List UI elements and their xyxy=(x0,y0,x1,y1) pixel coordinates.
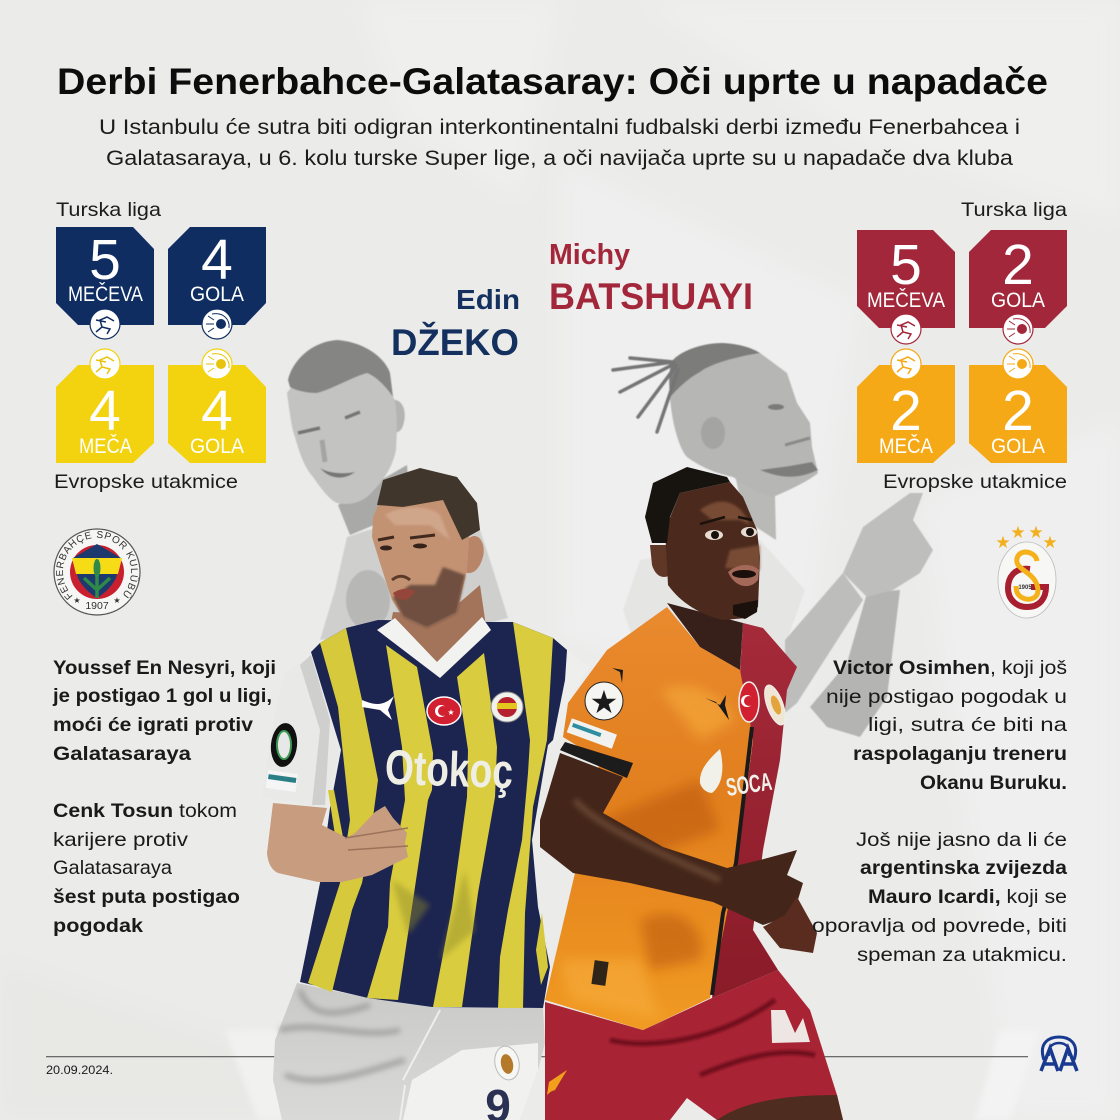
icon: ball in net xyxy=(1003,314,1033,344)
footer rule xyxy=(46,1056,1028,1057)
text block right xyxy=(812,657,1067,966)
logo: Anadolu Agency xyxy=(1041,1037,1077,1071)
player name: Michy Batshuayi xyxy=(549,239,753,317)
text block left: Galatasaraya xyxy=(53,857,172,879)
shorts xyxy=(273,983,545,1120)
sponsor: SOCAR: SOCA xyxy=(724,768,774,802)
title: Derbi Fenerbahce-Galatasaray: Oči uprte u napadače xyxy=(57,60,1048,102)
jersey body xyxy=(300,620,567,1008)
badge: Turkish flag xyxy=(739,682,759,722)
subtitle: U Istanbulu će sutra biti odigran interkontinentalni fudbalski derbi između Fenerbahcea i xyxy=(99,116,1020,139)
stat panel: Džeko league goals: 4 xyxy=(201,228,233,292)
stat panel: Batshuayi European matches: MEČA xyxy=(879,435,933,458)
stat panel: Batshuayi league matches: 5 xyxy=(890,233,922,297)
stat panel: Džeko European matches: 4 xyxy=(89,379,121,443)
sponsor: SOCAR xyxy=(700,749,774,802)
icon: player xyxy=(891,314,921,344)
stat panel: Batshuayi European matches xyxy=(857,349,955,463)
text block left xyxy=(52,657,276,937)
player name: Michy Batshuayi: Michy xyxy=(549,239,630,271)
text block left: Cenk Tosun tokom xyxy=(53,800,237,822)
text block right: Mauro Icardi, koji se xyxy=(868,886,1067,908)
text block right: Victor Osimhen , koji još xyxy=(833,657,1067,679)
text block right: oporavlja od povrede, biti xyxy=(812,915,1067,937)
puma logo xyxy=(362,696,394,720)
text block right: argentinska zvijezda xyxy=(860,857,1067,879)
jersey orange half xyxy=(545,607,753,1030)
arm and hand xyxy=(267,803,408,882)
shorts xyxy=(545,970,843,1120)
label: Turska liga left: Turska liga xyxy=(56,199,161,221)
stat panel: Batshuayi league matches: MEČEVA xyxy=(867,289,945,312)
stat panel: Batshuayi league goals: GOLA xyxy=(991,289,1045,312)
stat panel: Batshuayi league goals xyxy=(969,230,1067,344)
icon: player xyxy=(891,349,921,379)
stat panel: Džeko league goals: GOLA xyxy=(190,283,244,306)
stat panel: Džeko European goals: GOLA xyxy=(190,435,244,458)
icon: player xyxy=(90,309,120,339)
badge: Turkish flag xyxy=(427,697,461,725)
icon: ball in net xyxy=(202,349,232,379)
badge: Galatasaray crest xyxy=(760,683,790,727)
arm xyxy=(540,753,803,925)
subtitle: Galatasaraya, u 6. kolu turske Super lige, a oči navijača uprte su u napadače dva kluba xyxy=(106,147,1013,170)
stat panel: Džeko league goals xyxy=(168,227,266,339)
text block right: ligi, sutra će biti na xyxy=(868,714,1067,736)
logo: Fenerbahçe: ★ xyxy=(113,596,121,605)
stat panel: Džeko European matches: MEČA xyxy=(79,435,132,458)
player name: Edin Džeko: Edin xyxy=(456,284,520,315)
left sleeve xyxy=(262,655,341,808)
head xyxy=(645,467,760,620)
text block right: Još nije jasno da li će xyxy=(856,829,1067,851)
photo: Edin Džeko xyxy=(262,468,590,1120)
date: 20.09.2024. xyxy=(46,1063,113,1077)
player name: Michy Batshuayi: BATSHUAYI xyxy=(549,276,753,317)
logo: Galatasaray: ★ xyxy=(1028,523,1044,542)
armband xyxy=(560,742,633,778)
logo: Fenerbahçe: FENERBAHÇE SPOR KULÜBÜ xyxy=(56,531,139,600)
collar xyxy=(377,617,491,678)
subtitle xyxy=(99,116,1020,170)
logo: Galatasaray: ★ xyxy=(1010,523,1026,542)
badge: Fenerbahçe crest xyxy=(491,692,523,722)
logo: Fenerbahçe: ★ xyxy=(73,596,81,605)
stat panel: Džeko European goals xyxy=(168,349,266,463)
icon: ball in net xyxy=(202,309,232,339)
logo: Galatasaray: ★ xyxy=(1042,533,1058,552)
right sleeve xyxy=(553,650,590,745)
text block left: moći će igrati protiv xyxy=(53,714,253,736)
ghost photo: Michy Batshuayi xyxy=(613,343,933,760)
stat panel: Džeko European matches xyxy=(56,349,154,463)
head xyxy=(372,468,484,628)
neck xyxy=(390,585,486,664)
second hand xyxy=(763,897,817,953)
badge: Turkish flag: ★ xyxy=(447,708,455,717)
text block right: speman za utakmicu. xyxy=(857,944,1067,966)
text block right: raspolaganju treneru xyxy=(853,743,1067,765)
stat panel: Batshuayi European matches: 2 xyxy=(890,379,922,443)
logo: Galatasaray: 1905 xyxy=(1018,585,1032,591)
stat panel: Batshuayi European goals: 2 xyxy=(1002,379,1034,443)
stat panel: Batshuayi European goals: GOLA xyxy=(991,435,1045,458)
text block left: šest puta postigao xyxy=(53,886,240,908)
photo: Michy Batshuayi xyxy=(540,467,843,1120)
stat panel: Batshuayi league goals: 2 xyxy=(1002,233,1034,297)
label: Turska liga right: Turska liga xyxy=(961,199,1067,221)
badge: conference patch xyxy=(266,722,299,792)
stat panel: Batshuayi league matches xyxy=(857,230,955,344)
jersey red half xyxy=(712,623,797,998)
text block left: Youssef En Nesyri, koji xyxy=(53,657,276,679)
text block left: karijere protiv xyxy=(53,829,188,851)
text block left: je postigao 1 gol u ligi, xyxy=(52,685,272,707)
icon: ball in net xyxy=(1003,349,1033,379)
icon: player xyxy=(90,349,120,379)
stat panel: Batshuayi European goals xyxy=(969,349,1067,463)
stat panel: Džeko European goals: 4 xyxy=(201,379,233,443)
jersey centre stripe xyxy=(712,727,752,995)
logo: Galatasaray: ★ xyxy=(995,533,1011,552)
badge: foundation patch xyxy=(567,718,617,749)
ghost photo: Edin Džeko xyxy=(287,340,508,640)
text block right: Okanu Buruku. xyxy=(920,772,1067,794)
sponsor: Otokoç: Otokoç xyxy=(384,741,514,799)
logo: Fenerbahçe: 1907 xyxy=(85,600,109,612)
logo: Galatasaray xyxy=(995,523,1058,618)
badge: Champions League ball: ★ xyxy=(590,684,618,720)
label: Evropske utakmice left: Evropske utakmice xyxy=(54,471,238,493)
text block left: Galatasaraya xyxy=(53,743,191,765)
stat panel: Džeko league matches: 5 xyxy=(89,228,121,292)
label: Evropske utakmice right: Evropske utakmice xyxy=(883,471,1067,493)
shirt size tag xyxy=(591,960,609,986)
neck xyxy=(667,603,743,670)
stat panel: Džeko league matches: MEČEVA xyxy=(68,283,143,306)
stat panel: Džeko league matches xyxy=(56,227,154,339)
text block right: nije postigao pogodak u xyxy=(826,686,1067,708)
player name: Edin Džeko: DŽEKO xyxy=(391,321,519,363)
puma logos xyxy=(612,667,729,720)
text block left: pogodak xyxy=(53,915,143,937)
player name: Edin Džeko xyxy=(391,284,520,363)
